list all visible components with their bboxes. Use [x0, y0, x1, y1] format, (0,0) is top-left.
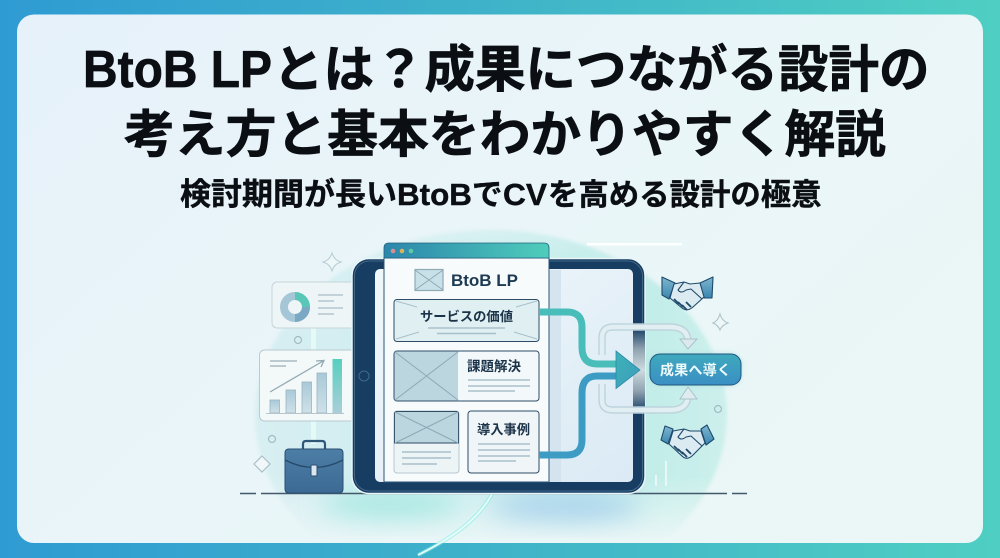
icon: handshake top — [662, 277, 713, 310]
section: service value — [394, 300, 539, 342]
light streak at bottom edge — [418, 494, 492, 555]
result pill — [650, 354, 741, 385]
sparkle right — [713, 314, 728, 330]
icon: envelope image — [415, 270, 443, 290]
small decorative rings — [268, 336, 722, 442]
diamond — [254, 456, 270, 472]
page heading: BtoB LP — [451, 271, 518, 290]
section: service value: サービスの価値 — [420, 308, 513, 324]
donut card — [272, 282, 362, 328]
title: 考え方と基本をわかりやすく解説 — [124, 106, 886, 163]
tablet frame — [352, 258, 645, 494]
light loop arrow bottom — [602, 384, 697, 410]
window dots — [391, 249, 413, 253]
donut chart — [284, 296, 306, 318]
growth arrow — [270, 360, 324, 392]
window title bar — [384, 243, 549, 258]
section: case studies: 導入事例 — [477, 421, 530, 437]
subtitle: で — [472, 178, 502, 212]
subtitle: を高める設計の極意 — [548, 178, 822, 212]
title: BtoB LP — [83, 41, 272, 99]
section: problem solving — [394, 351, 539, 401]
bar chart card — [260, 350, 360, 421]
light loop arrow top — [602, 327, 697, 355]
main arrow head — [616, 351, 640, 388]
title — [83, 41, 930, 163]
section: thumbnail card — [394, 411, 459, 473]
flow arrow from case studies — [539, 376, 620, 455]
icon: briefcase — [285, 441, 343, 493]
icon: handshake bottom — [661, 425, 714, 458]
ground line — [240, 492, 747, 494]
background circle with glow — [255, 230, 727, 555]
subtitle: CV — [503, 177, 547, 212]
subtitle: BtoB — [397, 177, 472, 212]
title: とは？成果につながる設計の — [273, 41, 930, 98]
section: problem solving: 課題解決 — [467, 359, 522, 374]
subtitle: 検討期間が長い — [180, 177, 397, 212]
result pill: 成果へ導く — [660, 362, 731, 378]
sparkle top left — [323, 253, 341, 271]
LP page window — [384, 243, 549, 482]
vertical accent lines — [656, 461, 666, 486]
subtitle — [180, 177, 822, 212]
flow arrow from service value — [539, 312, 620, 364]
section: case studies — [468, 411, 539, 473]
